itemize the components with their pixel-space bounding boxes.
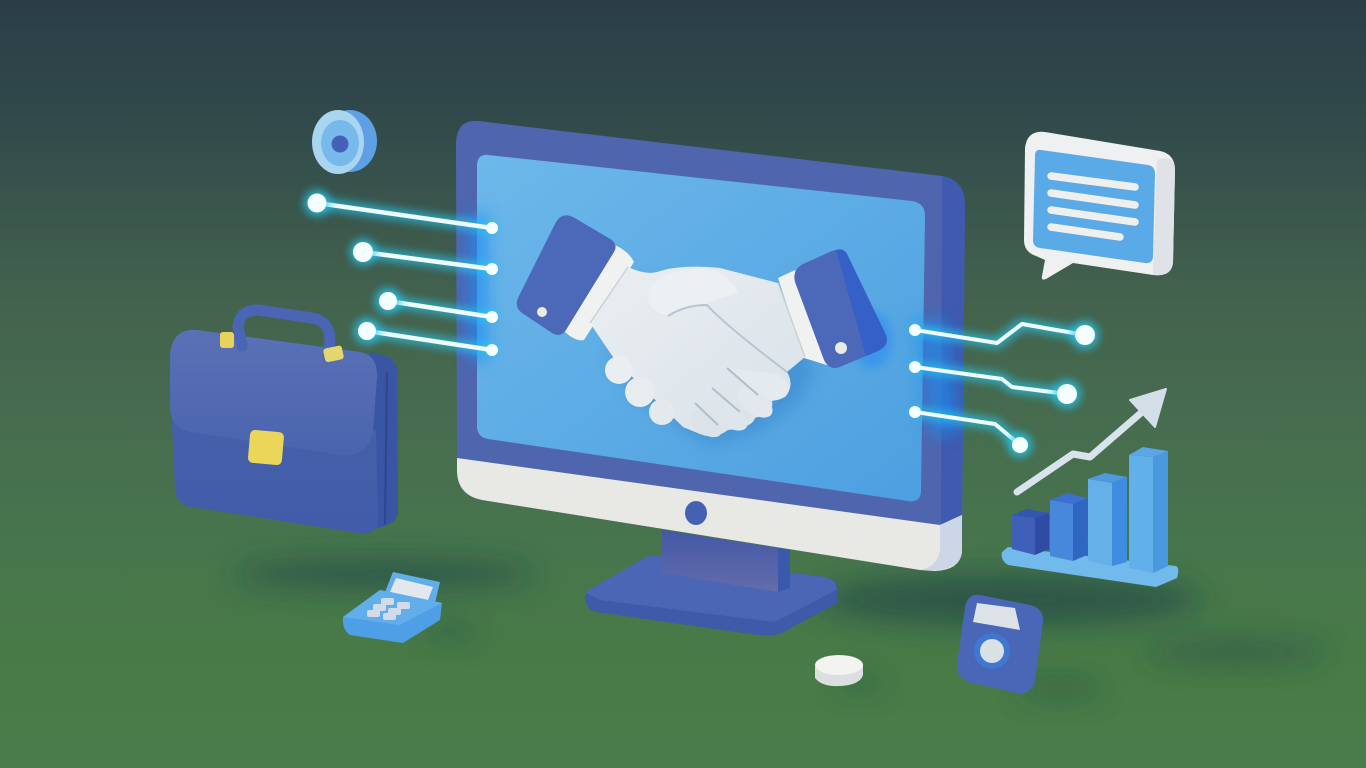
bar 4 (1129, 447, 1168, 457)
screen edge glows (478, 215, 945, 435)
left shirt cuff (563, 244, 634, 340)
calculator keys (367, 598, 410, 620)
bar 1 (1012, 509, 1049, 518)
calculator body (343, 590, 442, 643)
handle clips (220, 332, 234, 348)
briefcase body (171, 400, 378, 533)
floor shadows (235, 559, 1325, 694)
chart base (1002, 547, 1178, 587)
monitor screen (477, 155, 925, 501)
stand neck (662, 530, 778, 592)
briefcase flap (170, 330, 377, 455)
hands silhouette (590, 267, 805, 436)
soft shadow of hands (610, 280, 815, 445)
right glowing connection lines (909, 321, 1099, 457)
hand creases (668, 305, 787, 372)
glow behind right cuff (852, 312, 892, 368)
briefcase handle (238, 310, 330, 358)
icon: white pill (815, 655, 863, 686)
icon: briefcase (170, 310, 398, 533)
handshake (517, 215, 892, 445)
icon: round target button (312, 110, 377, 174)
monitor body (456, 121, 965, 571)
bar 3 (1088, 473, 1127, 483)
bar chart with arrow (1002, 389, 1178, 587)
bar 2 (1050, 493, 1087, 504)
monitor stand (585, 530, 838, 635)
icon: speech bubble (1024, 132, 1175, 280)
monitor right side (941, 176, 965, 526)
right shirt cuff (778, 270, 830, 366)
left cuff (517, 215, 616, 335)
monitor (456, 121, 965, 571)
calculator display (385, 572, 440, 603)
briefcase clasp (248, 430, 284, 465)
stand base (585, 555, 838, 635)
icon: calculator (343, 572, 442, 643)
power button (685, 501, 707, 525)
trend arrow (1017, 412, 1142, 492)
fingers (727, 368, 789, 401)
left glowing connection lines (304, 190, 498, 356)
knuckles (605, 356, 633, 384)
briefcase side gusset (362, 352, 398, 533)
icon: dial device (957, 595, 1043, 693)
thumb (648, 268, 738, 315)
monitor chin (457, 458, 962, 571)
right cuff (794, 250, 887, 368)
